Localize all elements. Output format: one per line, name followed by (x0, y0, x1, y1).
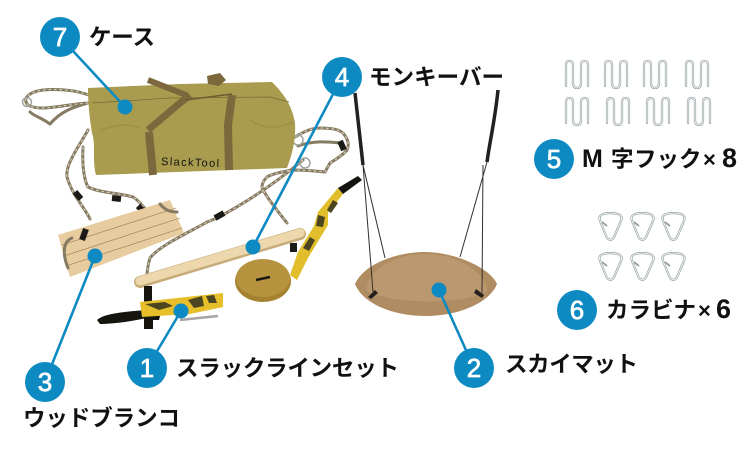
callout 5: M hooks: × (703, 147, 716, 172)
callout 6: carabiners (557, 290, 731, 330)
callout 1: slackline set (127, 304, 399, 388)
carabiners (599, 213, 685, 280)
callout 7: case: 7 (53, 22, 67, 52)
ropes (22, 90, 348, 288)
callout 7: case (40, 17, 155, 114)
callout 3: wooden swing: 3 (38, 367, 52, 397)
slackline strap (290, 176, 362, 280)
callout 3: wooden swing (23, 248, 180, 431)
callout 5: M hooks: 8 (722, 143, 737, 173)
sky mat (355, 90, 498, 316)
callout 5: M hooks: 5 (547, 144, 561, 174)
wooden swing board (58, 200, 184, 277)
callout 4: monkey bar: 4 (335, 62, 349, 92)
bag logo: SlackTool (161, 156, 219, 170)
callout 1: slackline set: スラックラインセット (176, 356, 399, 381)
callout 5: M hooks: 字 (611, 147, 634, 172)
callout 7: case: ケース (89, 25, 155, 50)
callout 2: sky mat: スカイマット (505, 352, 638, 377)
callout 1: slackline set: 1 (140, 353, 154, 383)
callout 4: monkey bar (246, 57, 504, 254)
callout 3: wooden swing: ウッドブランコ (23, 405, 180, 431)
callout 5: M hooks (534, 139, 737, 179)
callout 6: carabiners: 6 (570, 295, 584, 325)
callout 6: carabiners: カラビナ (606, 298, 696, 323)
carry bag (88, 73, 295, 175)
M hooks (566, 61, 710, 125)
callout 6: carabiners: × (698, 298, 711, 323)
belt roll (235, 259, 291, 302)
callout 6: carabiners: 6 (716, 294, 731, 324)
callout 2: sky mat: 2 (467, 353, 481, 383)
callout 2: sky mat (432, 282, 638, 388)
callout 4: monkey bar: モンキーバー (369, 65, 504, 90)
monkey bar (140, 233, 300, 282)
callout 5: M hooks: M (582, 145, 603, 173)
callout 5: M hooks: フック (634, 147, 702, 172)
ratchet (97, 286, 223, 329)
